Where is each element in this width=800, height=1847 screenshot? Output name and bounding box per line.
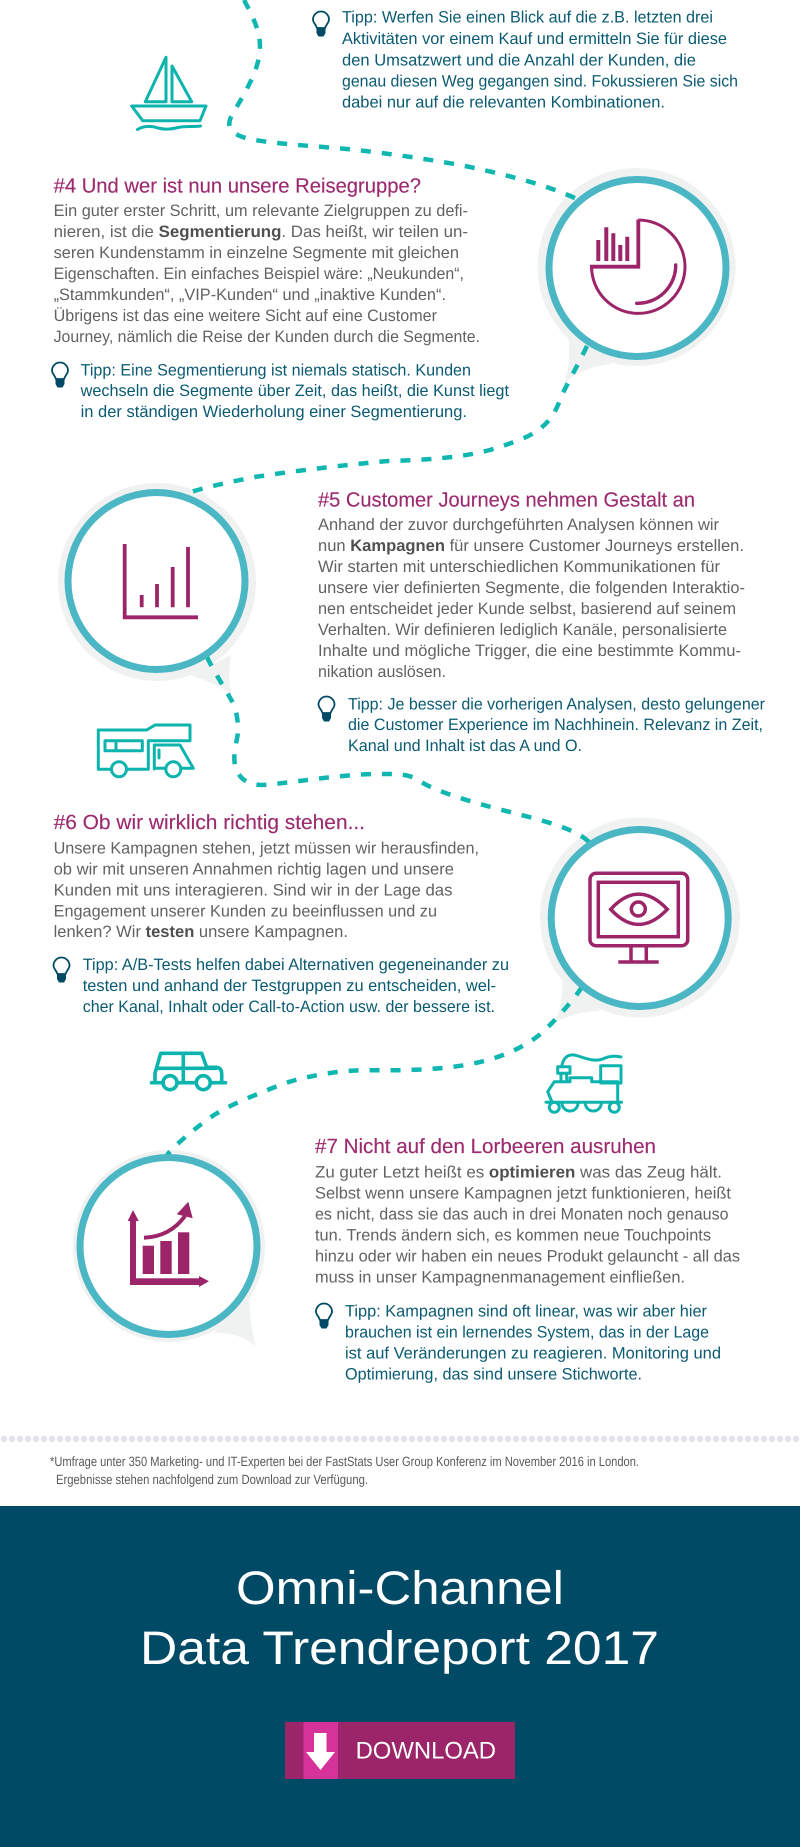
- icon: camper van: [98, 725, 193, 777]
- text: step 7 body: tun. Trends ändern sich, es kommen neue Touchpoints: [315, 1226, 711, 1244]
- dashed journey path: step 4 to step 5: [191, 346, 587, 492]
- panel: step 6: [54, 811, 728, 1016]
- dashed journey path: step 6 to step 7: [167, 987, 582, 1155]
- text: tip: dabei nur auf die relevanten Kombinationen.: [342, 94, 665, 112]
- panel: step 4: [52, 175, 726, 421]
- text: step 4 tip: in der ständigen Wiederholung einer Segmentierung.: [81, 403, 467, 421]
- text: step 7 tip: brauchen ist ein lernendes System, das in der Lage: [345, 1323, 709, 1341]
- text: step 5 tip: Tipp: Je besser die vorherigen Analysen, desto gelungener: [348, 695, 765, 713]
- circle: step 5: [68, 492, 245, 670]
- text: step 7 tip: Optimierung, das sind unsere Stichworte.: [345, 1365, 642, 1383]
- text: step 4 body: Eigenschaften. Ein einfaches Beispiel wäre: „Neukunden“,: [54, 265, 464, 283]
- text: step 6 tip: testen und anhand der Testgruppen zu entscheiden, wel-: [83, 977, 496, 995]
- heading: step 4: #4 Und wer ist nun unsere Reisegruppe?: [54, 175, 421, 198]
- text: step 4 body: Ein guter erster Schritt, um relevante Zielgruppen zu defi-: [54, 202, 468, 220]
- text: step 4 body: „Stammkunden“, „VIP-Kunden“ und „inaktive Kunden“.: [54, 286, 446, 304]
- text: step 7 tip: ist auf Veränderungen zu reagieren. Monitoring und: [345, 1344, 721, 1362]
- text: step 4 body: nieren, ist die Segmentierung. Das heißt, wir teilen un-: [54, 223, 468, 241]
- footnote: Ergebnisse stehen nachfolgend zum Download zur Verfügung.: [56, 1472, 368, 1487]
- panel: download banner: [0, 1506, 800, 1847]
- icon: light bulb: [313, 12, 329, 36]
- icon: steam train: [546, 1055, 622, 1112]
- text: step 7 body: [315, 1163, 740, 1286]
- icon: download arrow: [306, 1733, 335, 1770]
- heading: report title: [140, 1561, 659, 1674]
- text: step 5 body: [318, 516, 745, 681]
- text: step 4 body: Übrigens ist das eine weitere Sicht auf eine Customer: [54, 307, 437, 325]
- text: step 5 body: nun Kampagnen für unsere Customer Journeys erstellen.: [318, 537, 744, 555]
- text: step 6 body: Engagement unserer Kunden zu beeinflussen und zu: [54, 902, 437, 920]
- speech bubble halo: step 6: [540, 818, 740, 1023]
- text: step 5 body: nen entscheidet jeder Kunde selbst, basierend auf seinem: [318, 600, 736, 618]
- text: step 6 body: Unsere Kampagnen stehen, jetzt müssen wir herausfinden,: [54, 839, 479, 857]
- icon: pie and bar chart: [590, 220, 685, 313]
- icon: light bulb: [318, 696, 334, 722]
- icon: monitor with eye: [590, 873, 688, 962]
- button: download: [285, 1722, 515, 1779]
- text: step 7 tip: Tipp: Kampagnen sind oft linear, was wir aber hier: [345, 1303, 707, 1321]
- text: tip: den Umsatzwert und die Anzahl der Kunden, die: [342, 51, 696, 69]
- speech bubble halo: step 5: [58, 483, 256, 694]
- text: step 7 body: hinzu oder wir haben ein neues Produkt gelauncht - all das: [315, 1247, 740, 1265]
- text: step 6 tip: Tipp: A/B-Tests helfen dabei Alternativen gegeneinander zu: [83, 956, 509, 974]
- text: step 5 body: nikation auslösen.: [318, 663, 446, 681]
- heading: report title: Omni-Channel: [236, 1561, 564, 1614]
- icon: light bulb: [52, 362, 68, 388]
- text: step 6 body: [54, 839, 479, 941]
- text: step 6 tip: cher Kanal, Inhalt oder Call-to-Action usw. der bessere ist.: [83, 998, 495, 1016]
- text: step 5 body: Verhalten. Wir definieren lediglich Kanäle, personalisierte: [318, 621, 727, 639]
- footnote: *Umfrage unter 350 Marketing- und IT-Experten bei der FastStats User Group Konferenz im November 2016 in London.: [50, 1454, 639, 1469]
- icon: light bulb: [316, 1304, 332, 1328]
- icon: bar chart: [125, 544, 198, 617]
- text: step 7 body: muss in unser Kampagnenmanagement einfließen.: [315, 1268, 685, 1286]
- dashed journey path: step 5 to step 6: [207, 657, 589, 842]
- button label: DOWNLOAD: [356, 1738, 496, 1765]
- heading: step 6: #6 Ob wir wirklich richtig stehen...: [54, 811, 365, 834]
- footnote: [50, 1454, 639, 1487]
- text: step 4 tip: [80, 361, 509, 421]
- text: step 5 body: unsere vier definierten Segmente, die folgenden Interaktio-: [318, 579, 745, 597]
- text: step 5 tip: Kanal und Inhalt ist das A und O.: [348, 737, 582, 755]
- circle: step 7: [80, 1158, 257, 1334]
- text: step 5 tip: [348, 695, 765, 755]
- text: tip: genau diesen Weg gegangen sind. Fokussieren Sie sich: [342, 73, 738, 91]
- text: step 4 tip: Tipp: Eine Segmentierung ist niemals statisch. Kunden: [81, 361, 471, 379]
- speech bubble halo: step 4: [538, 168, 736, 385]
- text: step 5 body: Inhalte und mögliche Trigger, die eine bestimmte Kommu-: [318, 642, 741, 660]
- text: step 6 body: Kunden mit uns interagieren. Sind wir in der Lage das: [54, 881, 453, 899]
- text: step 6 body: ob wir mit unseren Annahmen richtig lagen und unsere: [54, 860, 454, 878]
- panel: step 7: [80, 1135, 740, 1383]
- panel: step 5: [68, 489, 765, 755]
- text: step 6 tip: [83, 956, 509, 1016]
- circle: step 4: [549, 180, 726, 356]
- speech bubble halo: step 7: [73, 1150, 265, 1346]
- icon: car: [152, 1053, 226, 1090]
- text: step 4 tip: wechseln die Segmente über Zeit, das heißt, die Kunst liegt: [80, 382, 509, 400]
- text: step 7 body: Selbst wenn unsere Kampagnen jetzt funktionieren, heißt: [315, 1184, 731, 1202]
- panel: tip for step 3: [313, 9, 738, 112]
- text: step 7 body: Zu guter Letzt heißt es optimieren was das Zeug hält.: [315, 1163, 722, 1181]
- icon: light bulb: [54, 958, 70, 982]
- heading: step 5: #5 Customer Journeys nehmen Gestalt an: [318, 489, 695, 512]
- icon: growth chart: [128, 1202, 209, 1287]
- text: step 7 tip: [345, 1303, 721, 1383]
- text: tip: Tipp: Werfen Sie einen Blick auf die z.B. letzten drei: [342, 9, 713, 27]
- text: step 4 body: seren Kundenstamm in einzelne Segmente mit gleichen: [54, 244, 459, 262]
- text: step 4 body: Journey, nämlich die Reise der Kunden durch die Segmente.: [54, 328, 480, 346]
- text: tip: [342, 9, 738, 112]
- icon: sailboat: [132, 57, 206, 129]
- text: step 4 body: [54, 202, 480, 346]
- text: step 5 body: Wir starten mit unterschiedlichen Kommunikationen für: [318, 558, 720, 576]
- text: step 7 body: es nicht, dass sie das auch in drei Monaten noch genauso: [315, 1205, 729, 1223]
- text: step 5 body: Anhand der zuvor durchgeführten Analysen können wir: [318, 516, 719, 534]
- circle: step 6: [551, 830, 728, 1006]
- heading: step 7: #7 Nicht auf den Lorbeeren ausruhen: [315, 1135, 656, 1158]
- text: step 6 body: lenken? Wir testen unsere Kampagnen.: [54, 923, 348, 941]
- dashed journey path: top to step 4: [229, 0, 579, 200]
- text: tip: Aktivitäten vor einem Kauf und ermitteln Sie für diese: [342, 30, 727, 48]
- text: step 5 tip: die Customer Experience im Nachhinein. Relevanz in Zeit,: [348, 716, 763, 734]
- heading: report title: Data Trendreport 2017: [140, 1621, 659, 1674]
